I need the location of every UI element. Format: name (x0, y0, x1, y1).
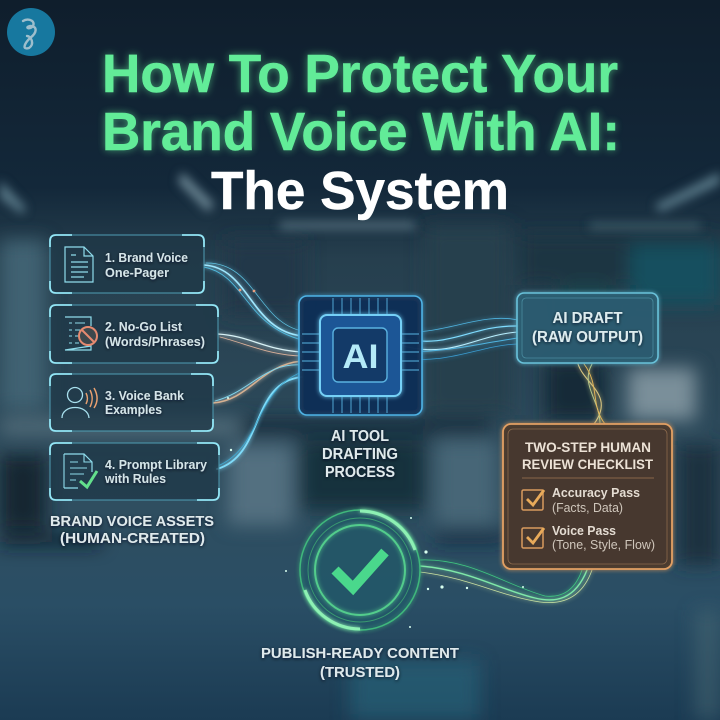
card 3: voice bank examples: 3. Voice Bank (105, 389, 184, 403)
icon: publish-ready check badge (300, 510, 420, 630)
icon: checklist with prohibition sign (65, 317, 97, 350)
card 1: brand voice one-pager: One-Pager (105, 266, 169, 280)
flow lines: review checklist to publish-ready badge (420, 560, 592, 603)
panel: two-step human review checklist (503, 424, 672, 569)
checklist item: voice pass (522, 524, 655, 552)
card 1: brand voice one-pager (50, 235, 204, 293)
logo (7, 8, 55, 56)
card 3: voice bank examples: Examples (105, 403, 162, 417)
title: Brand Voice With AI: (102, 102, 620, 162)
title (102, 44, 620, 221)
checklist item: accuracy pass: (Facts, Data) (552, 501, 623, 515)
checklist item: voice pass: Voice Pass (552, 524, 616, 538)
card 2: no-go list: (Words/Phrases) (105, 335, 205, 349)
assets caption: BRAND VOICE ASSETS (50, 513, 214, 530)
chip caption: PROCESS (325, 464, 395, 481)
checklist item: accuracy pass: Accuracy Pass (552, 486, 640, 500)
icon: document (65, 247, 93, 282)
card 3: voice bank examples (50, 374, 213, 431)
icon: document with check (64, 454, 97, 488)
checklist heading: REVIEW CHECKLIST (522, 457, 654, 472)
assets caption: (HUMAN-CREATED) (60, 530, 205, 547)
icon: AI chip (299, 296, 422, 415)
title: The System (211, 161, 509, 221)
chip label: AI (342, 338, 378, 376)
card 4: prompt library with rules (50, 443, 219, 500)
flow lines: AI chip to AI draft (400, 318, 518, 359)
publish-ready caption: PUBLISH-READY CONTENT (261, 645, 459, 662)
panel: brand voice assets (50, 235, 219, 547)
card 2: no-go list: 2. No-Go List (105, 320, 183, 334)
card 2: no-go list (50, 305, 218, 363)
card 4: prompt library with rules: with Rules (104, 472, 166, 486)
checklist heading: TWO-STEP HUMAN (525, 440, 651, 455)
panel: AI draft: (RAW OUTPUT) (532, 329, 643, 346)
checklist item: accuracy pass (522, 486, 640, 515)
sparkle particles (227, 289, 524, 628)
flow lines: AI draft to review checklist (578, 364, 605, 424)
card 4: prompt library with rules: 4. Prompt Library (105, 458, 207, 472)
flow lines: assets to AI chip (204, 263, 302, 469)
title: How To Protect Your (102, 44, 618, 104)
card 1: brand voice one-pager: 1. Brand Voice (105, 251, 188, 265)
chip caption: AI TOOL (331, 428, 389, 445)
icon: person with sound waves (62, 388, 97, 418)
chip caption: DRAFTING (322, 446, 398, 463)
publish-ready caption: (TRUSTED) (320, 664, 400, 681)
panel: AI draft: AI DRAFT (552, 310, 623, 327)
checklist item: voice pass: (Tone, Style, Flow) (552, 538, 655, 552)
panel: AI draft (517, 293, 658, 363)
